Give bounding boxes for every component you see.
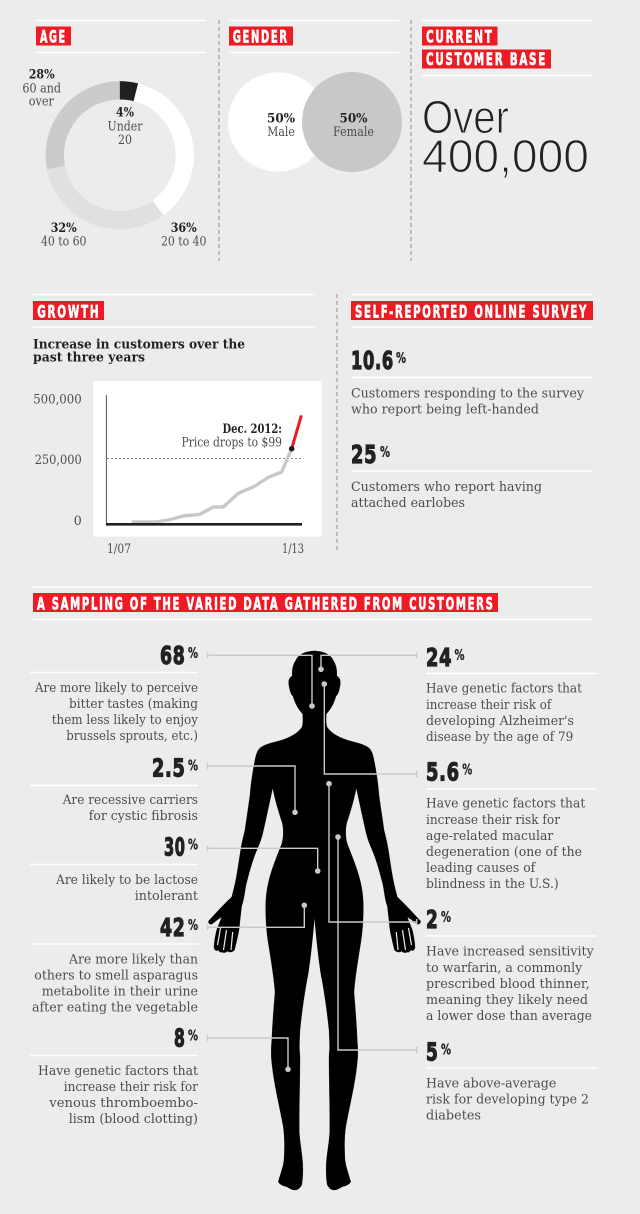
stat: 10.6%: who report being left-handed (351, 402, 539, 417)
line chart: customers over time (33, 381, 322, 557)
heading: growth (33, 301, 104, 322)
stat: 2.5% cystic fibrosis (62, 754, 198, 824)
stat: 8% blood clotting: venous thromboembo- (48, 1096, 198, 1111)
stat: 2% warfarin (426, 905, 594, 1024)
stat: 5% type 2 diabetes (426, 1038, 589, 1124)
big number: over 400,000: Over (422, 91, 509, 143)
label: 4% under 20: 20 (118, 133, 132, 148)
stat: 68% bitter tastes: bitter tastes (making (69, 697, 198, 712)
stat: 2% warfarin: % (441, 908, 451, 926)
stat: 2% warfarin: 2 (426, 905, 438, 934)
stat: 10.6%: % (396, 349, 406, 367)
heading: current customer base: CUSTOMER BASE (426, 50, 547, 70)
label: 4% under 20: 4% (116, 106, 135, 121)
label: 28% 60 and over: over (29, 95, 54, 110)
stat: 68% bitter tastes: them less likely to enjoy (52, 713, 199, 728)
stat: 10.6% (351, 346, 585, 417)
stat: 2.5% cystic fibrosis: Are recessive carriers (62, 793, 198, 808)
body silhouette (208, 651, 421, 1190)
stat: 24% Alzheimer's: increase their risk of (426, 698, 552, 713)
stat: 2% warfarin: prescribed blood thinner, (426, 977, 590, 992)
heading: gender: GENDER (233, 27, 289, 47)
stat: 25%: attached earlobes (351, 496, 465, 511)
heading: gender (229, 26, 293, 47)
stat: 30% lactose intolerant: 30 (164, 833, 186, 862)
heading: growth: GROWTH (37, 302, 100, 322)
big number: over 400,000: 400,000 (422, 130, 589, 182)
stat: 5.6% macular degeneration: Have genetic factors that (426, 797, 586, 812)
stat: 30% lactose intolerant: Are likely to be lactose (55, 873, 198, 888)
stat: 5.6% macular degeneration: leading causes of (426, 861, 536, 876)
stat: 8% blood clotting: 8 (174, 1024, 186, 1053)
stat: 8% blood clotting: % (188, 1027, 198, 1045)
label: 32% 40 to 60: 40 to 60 (41, 234, 86, 249)
label: 36% 20 to 40 (161, 221, 206, 249)
panel: age (22, 26, 206, 249)
heading: current customer base: CURRENT (426, 27, 494, 47)
stat: 42% asparagus: metabolite in their urine (42, 984, 198, 1000)
stat: 24% Alzheimer's: disease by the age of 79 (426, 730, 573, 745)
stat: 8% blood clotting (38, 1024, 199, 1127)
donut chart: age distribution (55, 90, 185, 220)
subheading: Increase in customers over the (33, 337, 245, 352)
stat: 25%: % (380, 443, 390, 461)
label: 50% male: Male (267, 125, 295, 140)
axis labels: 1/07 (107, 542, 131, 557)
axis labels: 0 (74, 514, 82, 529)
stat: 24% Alzheimer's: Have genetic factors that (426, 682, 583, 697)
axis labels: 500,000 (33, 393, 82, 408)
stat: 2% warfarin: to warfarin, a commonly (426, 961, 583, 976)
stat: 5.6% macular degeneration: age-related macular (426, 829, 554, 844)
stat: 24% Alzheimer's: % (454, 646, 465, 664)
stat: 68% bitter tastes: % (188, 644, 198, 662)
label: 28% 60 and over: 28% (29, 68, 55, 83)
stat: 8% blood clotting: increase their risk for (64, 1080, 199, 1095)
label: 50% female (333, 112, 374, 140)
stat: 5.6% macular degeneration: 5.6 (426, 758, 460, 787)
label: 4% under 20: Under (108, 120, 143, 134)
stat: 10.6%: Customers responding to the survey (351, 387, 585, 402)
panel: current customer base (422, 26, 589, 182)
stat: 42% asparagus: Are more likely than (68, 952, 199, 967)
circle: male (228, 72, 327, 172)
label: 28% 60 and over (22, 68, 61, 110)
label: 4% under 20 (108, 106, 143, 148)
stat: 5% type 2 diabetes: diabetes (426, 1108, 481, 1124)
stat: 2% warfarin: a lower dose than average (426, 1009, 592, 1024)
label: 32% 40 to 60 (41, 221, 86, 249)
stat: 42% asparagus: % (188, 916, 198, 934)
heading: age (36, 26, 71, 47)
stat: 25% (351, 440, 542, 511)
stat: 25%: Customers who report having (351, 480, 542, 495)
axis labels (33, 393, 304, 557)
label: 50% male (267, 112, 296, 140)
stat: 30% lactose intolerant (55, 833, 199, 904)
panel: growth (33, 301, 322, 557)
stat: 5.6% macular degeneration: % (462, 761, 473, 779)
stat: 68% bitter tastes: 68 (160, 641, 186, 670)
circle: female (302, 72, 402, 172)
stat: 5% type 2 diabetes: risk for developing type 2 (426, 1092, 589, 1108)
stat: 2.5% cystic fibrosis: % (188, 757, 198, 775)
stat: 68% bitter tastes: brussels sprouts, etc.) (66, 729, 198, 744)
stat: 2.5% cystic fibrosis: for cystic fibrosis (89, 809, 198, 824)
stat: 30% lactose intolerant: % (188, 836, 198, 854)
panel: gender (228, 26, 402, 172)
label: 50% male: 50% (267, 112, 296, 127)
stat: 2% warfarin: Have increased sensitivity (426, 945, 594, 960)
stat: 5.6% macular degeneration: degeneration (one of the (426, 845, 582, 860)
annotation: price drop (182, 422, 282, 451)
stat: 5% type 2 diabetes: Have above-average (426, 1077, 557, 1092)
axis labels: 1/13 (282, 542, 304, 557)
stat: 24% Alzheimer's: 24 (426, 643, 452, 672)
stat: 68% bitter tastes: Are more likely to perceive (34, 681, 198, 696)
heading: current customer base (422, 26, 551, 70)
label: 28% 60 and over: 60 and (22, 81, 61, 96)
stat: 2.5% cystic fibrosis: 2.5 (152, 754, 186, 783)
stat: 42% asparagus: after eating the vegetable (32, 1000, 198, 1016)
stat: 5% type 2 diabetes: % (441, 1041, 451, 1059)
stat: 68% bitter tastes (34, 641, 199, 744)
stat: 42% asparagus: others to smell asparagus (34, 968, 198, 984)
stat: 30% lactose intolerant: intolerant (135, 889, 199, 904)
stat: 5.6% macular degeneration (426, 758, 586, 892)
label: 32% 40 to 60: 32% (51, 221, 77, 236)
stat: 25%: 25 (351, 440, 377, 469)
label: 50% female: 50% (340, 112, 368, 127)
stat: 8% blood clotting: Have genetic factors that (38, 1064, 199, 1079)
heading: age: AGE (40, 27, 67, 47)
annotation: price drop: Dec. 2012: (222, 422, 282, 437)
label: 36% 20 to 40: 36% (171, 221, 197, 236)
connector lines (208, 652, 417, 1072)
stat: 42% asparagus (32, 913, 199, 1016)
annotation: price drop: Price drops to $99 (182, 436, 282, 451)
stat: 24% Alzheimer's (426, 643, 583, 745)
stat: 24% Alzheimer's: developing Alzheimer's (426, 714, 574, 729)
stat: 10.6%: 10.6 (351, 346, 394, 375)
stat: 42% asparagus: 42 (160, 913, 186, 942)
axis labels: 250,000 (35, 453, 82, 468)
stat: 5.6% macular degeneration: blindness in the U.S.) (426, 877, 559, 892)
big number: over 400,000 (422, 91, 589, 182)
label: 50% female: Female (333, 125, 374, 140)
stat: 2% warfarin: meaning they likely need (426, 993, 588, 1008)
subheading (33, 337, 245, 366)
panel: self-reported online survey (351, 301, 593, 511)
stat: 5.6% macular degeneration: increase their risk for (426, 813, 561, 828)
stat: 5% type 2 diabetes: 5 (426, 1038, 438, 1067)
stat: 8% blood clotting: lism (blood clotting) (69, 1112, 198, 1127)
subheading: past three years (33, 351, 145, 366)
label: 36% 20 to 40: 20 to 40 (161, 234, 206, 249)
